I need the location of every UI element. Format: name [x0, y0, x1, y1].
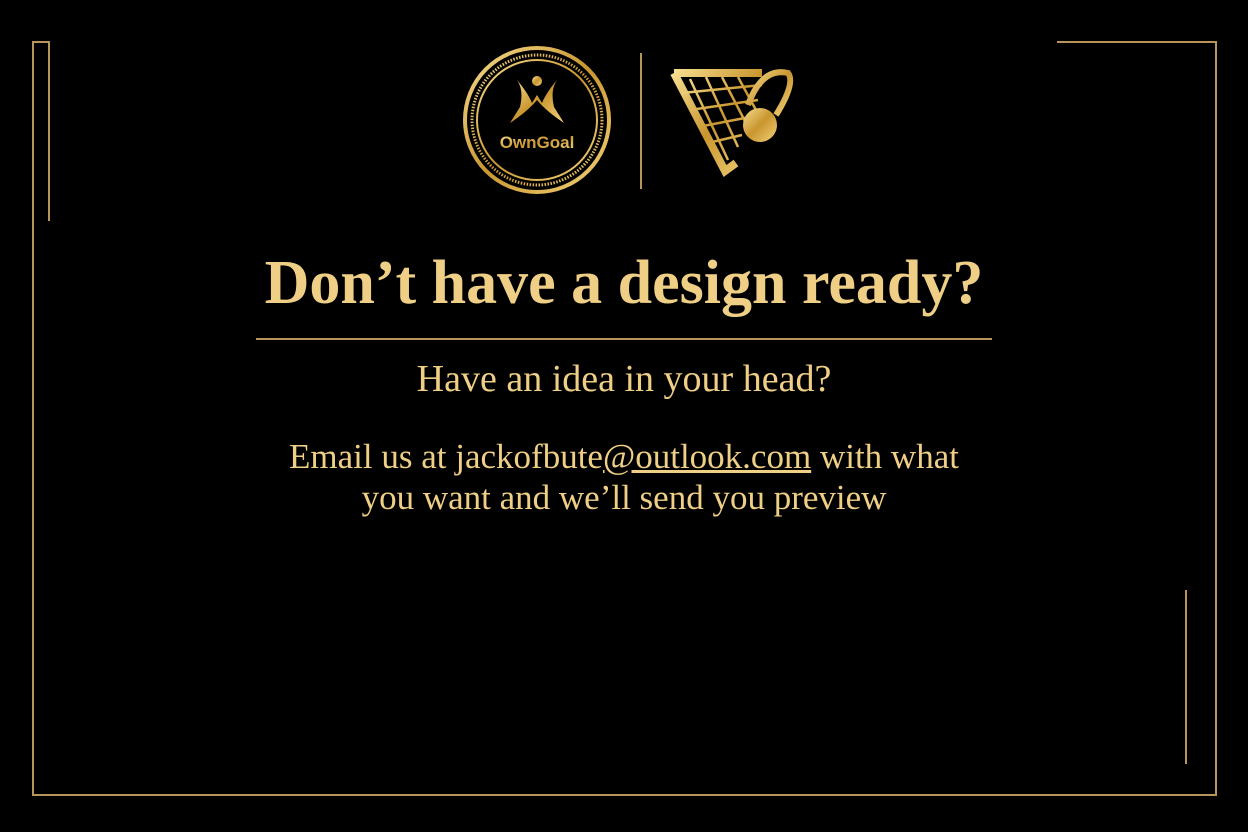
- body text: you want and we’ll send you preview: [362, 478, 886, 517]
- logo: net and ball: [670, 69, 794, 177]
- logo: OwnGoal badge: OwnGoal: [500, 133, 574, 152]
- title underline: [256, 338, 992, 340]
- logo: OwnGoal badge: [463, 46, 611, 194]
- body text: Email us at jackofbute@outlook.com with what: [289, 437, 959, 476]
- title: Don’t have a design ready?: [265, 249, 983, 317]
- body text: [289, 437, 959, 517]
- divider vertical: [640, 53, 642, 189]
- subtitle: Have an idea in your head?: [417, 358, 831, 400]
